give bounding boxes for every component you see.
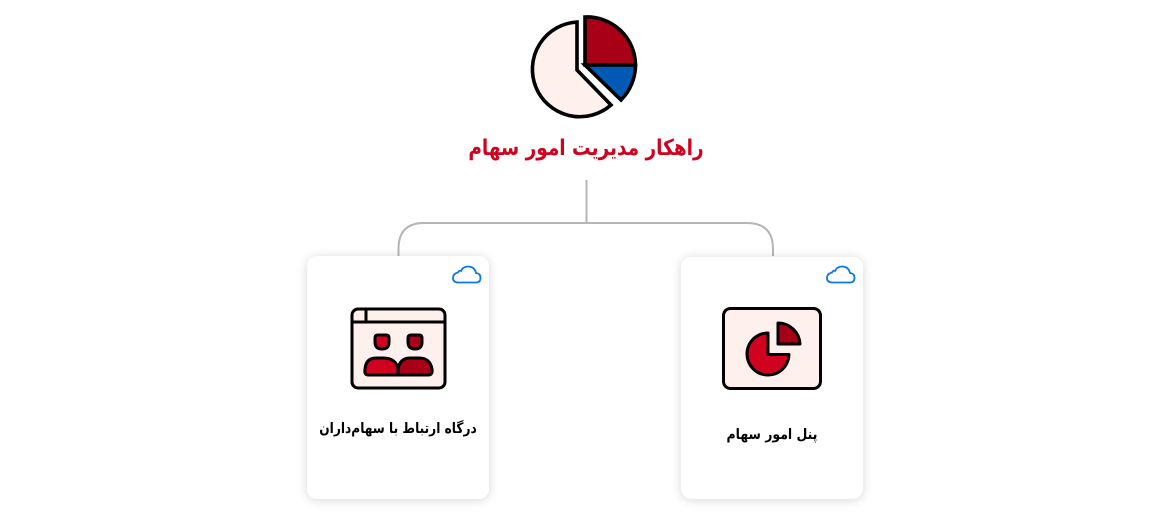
card: shareholder portal <box>307 256 489 499</box>
icon: people window <box>350 308 446 390</box>
label: پنل امور سهام <box>727 427 817 443</box>
label: درگاه ارتباط با سهام‌داران <box>319 421 477 437</box>
icon: cloud <box>452 266 482 284</box>
title: راهکار مدیریت امور سهام <box>468 136 704 161</box>
icon: pie window <box>722 307 822 390</box>
card: share affairs panel <box>681 257 863 499</box>
icon: cloud <box>826 266 856 284</box>
